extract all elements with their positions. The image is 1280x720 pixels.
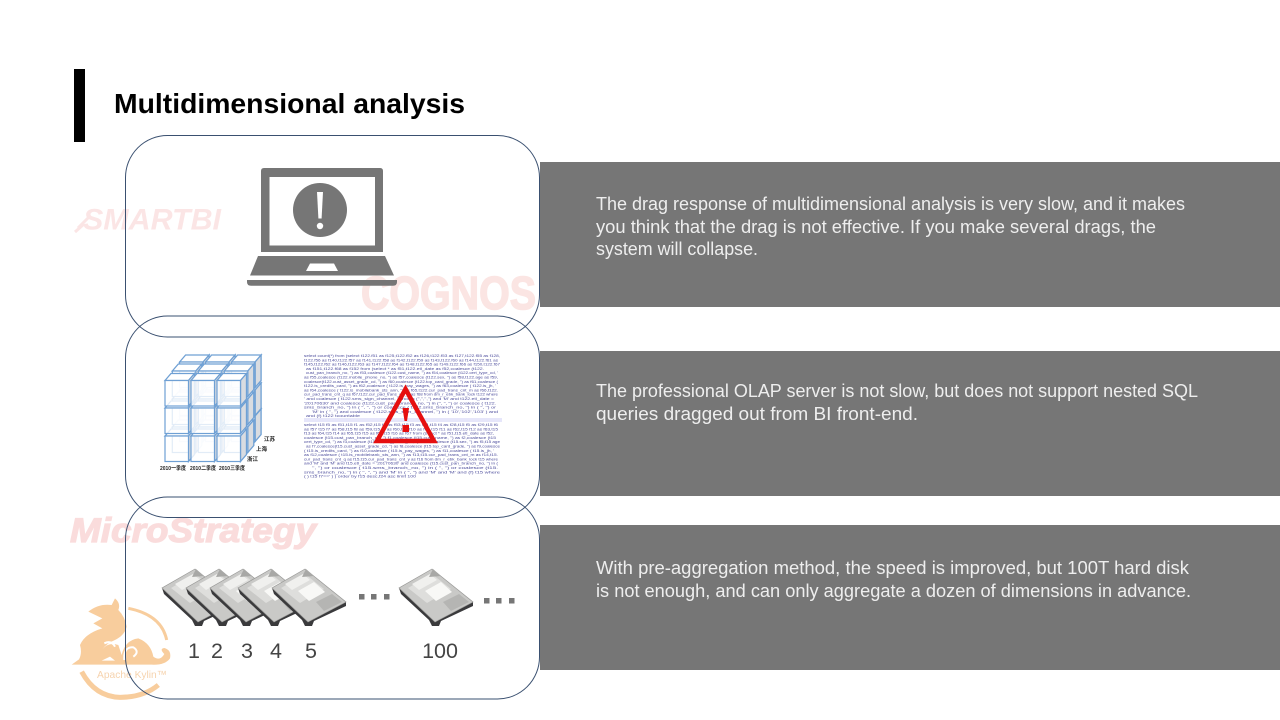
code: long SQL query: ( ) t15 f7==' ) ) order by f15 desc,f24 asc limit 100 [304,474,417,479]
code: long SQL query: as f55,coalesce (t122.mobile_phone_no, '') as f57,coalesce (t122.sex, '') as f58,t122.age as f59, [304,374,498,380]
code: long SQL query: ' and coalesce ( t122.sms_sign_channel, '') not in ('','','','') and 'M' and t122.etl_date = [304,396,495,401]
panel background [540,351,1280,496]
code: long SQL query: f13 as f64,t15 f14 as f65,t15 f15 as f66,t15 f16 as f67 from (select * as f51,t15.etl_date as f52, [304,431,494,436]
panel: slow drag response [540,162,1280,307]
code: long SQL query: cert_type_cd, '') as f3,coalesce (t15.mobile_phone_no, '') as f4,coalesce (t15.sex, '') as f5,t15 age [304,439,501,444]
disk numbers: 5 [305,639,317,663]
text block: slow drag response: The drag response of multidimensional analysis is very slow, and it makes [596,194,1185,214]
icon: warning triangle [377,389,434,441]
text block: slow drag response: you think that the drag is not effective. If you make several drags, the [596,217,1156,237]
text block: OLAP server limitation: queries dragged out from BI front-end. [596,404,918,424]
highlighted SQL line [304,418,502,422]
code: long SQL query: sms_branch_no, '') in ( '', '', '') or coalesce ( t122.sms_branch_no, '') in ( '', '') or [304,405,497,410]
watermark: Apache Kylin logo: Apache Kylin™ [97,669,167,681]
text block: OLAP server limitation: The professional OLAP server is not slow, but does not support nested SQL [596,381,1198,401]
code: long SQL query: ( t15.is_credits_card, '') as f10,coalesce ( t15.is_pay_wages, '') as f11,coalesce ( t15.is_jh, ' [304,448,494,453]
code: long SQL query: as f64,coalesce ( t122.is_mobilebank_sts_ann, '') as f65,t122.cur_pad_trans_cnt_m as f66,t122. [304,387,498,392]
icon: row of hard disks [162,569,514,626]
code: long SQL query: as f7,coalesce(t15.cust_asset_grade_cd, '') as f8,coalesce (t15.top_card_grade, '') as f9,coalesce [306,444,501,448]
code: long SQL query: select count(*) from (select t122.f51 as f125,t122.f52 as f126,t122.f53 as f127,t122.f55 as f128, [304,353,500,358]
code: long SQL query: cur_pad_trans_cnt_q as f67,t122.cur_pad_trans_cnt_y as f68 from dm_r_ebk_bank_lock t122 where [304,392,499,397]
code: long SQL query: coalesce (t15.cust_pan_branch_no, '') f1,coalesce (t15.cust_name, '') as f2,coalesce (t15 [304,435,497,440]
chart: OLAP data cube [160,355,276,472]
title accent bar [74,69,85,142]
text block: pre-aggregation limitation [596,558,1191,601]
disk numbers: 2 [211,639,223,663]
icon: laptop with alert [247,168,397,286]
cube axis labels: 浙江 [247,455,259,463]
panel background [540,162,1280,307]
cube axis labels: 2010一季度 [160,464,186,472]
watermark: SMARTBI logo: SMARTBI [83,204,222,236]
text block: pre-aggregation limitation: With pre-aggregation method, the speed is improved, but 100T hard disk [596,558,1190,578]
card outline: cube and SQL [126,316,540,518]
ellipsis after disk 100 [484,598,514,604]
cube axis labels: 2010三季度 [219,464,245,472]
code: long SQL query: and (f) t122 tcountable [306,413,361,418]
text block: slow drag response: system will collapse. [596,239,758,259]
ellipsis after disk 5 [359,594,390,600]
code: long SQL query: and 'M' and 'M' and t15.etl_date = '20170630' and coalesce (t15.cust_pan_branch_no, '') in ( [304,461,499,466]
watermark: MicroStrategy logo: MicroStrategy [70,512,318,550]
cube axis labels: 2010二季度 [190,464,216,472]
back layer of cubes [180,355,261,442]
text block: OLAP server limitation [596,381,1198,424]
code: long SQL query: as f12,coalesce ( t15.is_mobilebank_sts_ann, '') as f13,t15.cur_pad_trans_cnt_m as f14,t15. [304,452,498,457]
code: long SQL query: coalesce(t122.cust_asset_grade_cd, '') as f60,coalesce (t122.top_card_grade, '') as f61,coalesce ( [304,379,499,384]
code: long SQL query: cust_pan_branch_no, '') as f53,coalesce (t122.cust_name, '') as f54,coalesce (t122.cert_type_cd, ' [306,370,498,375]
code: long SQL query: '', '') or coalesce ( t15.sms_branch_no, '') in ( '', '') or coalesce (t15. [312,465,498,470]
card outline: laptop [126,136,540,337]
panel background [540,525,1280,670]
code: long SQL query: t122.f56 as f140,t122.f57 as f141,t122.f58 as f142,t122.f59 as f143,t122.f60 as f144,t122.f61 as [304,357,498,362]
cube axis labels [160,435,276,472]
panel: pre-aggregation limitation [540,525,1280,670]
disk numbers: 3 [241,639,253,663]
code: long SQL query: f145,t122.f62 as f146,t122.f63 as f147,t122.f64 as f148,t122.f65 as f149,t122.f66 as f150,t122.f67 [304,362,501,367]
watermark: Apache Kylin logo [72,598,170,697]
code: long SQL query: t122.is_credits_card, '') as f62,coalesce ( t122.is_pay_wages, '') as f63,coalesce ( t122.is_jh, ' [304,383,496,388]
cube axis labels: 上海 [256,445,268,453]
code: long SQL query: as f57 t15 f7 as f58,t15 f8 as f59,t15 f9 as f60,t15 f10 as f61,t15 f11 as f62,t15 f12 as f63,t15 [304,426,499,431]
code: long SQL query [304,353,502,479]
disk numbers: 4 [270,639,282,663]
panel: OLAP server limitation [540,351,1280,496]
front layer of cubes [165,374,246,462]
code: long SQL query: cur_pad_trans_cnt_q as f15,t15.cur_pad_trans_cnt_y as f16 from dm_r_ebk_bank_lock t15 where [304,456,499,461]
code: long SQL query: sms_branch_no, '') in ( '', '', '') and 'M' in ( '', '') and 'M' and 'M' and (f) t15 where [304,469,501,474]
title: Multidimensional analysis [114,88,465,119]
cube axis labels: 江苏 [264,435,276,443]
disk numbers: 100 [422,639,458,663]
code: long SQL query: 'M' in ( '', '') and coalesce ( t122.sms_sign_channel, '') in ( '10','102','103' ) and [312,409,498,414]
disk numbers: 1 [188,639,200,663]
middle layer of cubes [172,364,254,452]
code: long SQL query: select t15 f5 as f51,t15 f1 as f52,t15 f2 as f53,t15 f3 as f54,t15 f4 as f28,t15 f5 as f29,t15 f6 [304,422,499,427]
text block: pre-aggregation limitation: is not enough, and can only aggregate a dozen of dimensions in advance. [596,581,1191,601]
card outline: hard disks [126,497,540,699]
text block: slow drag response [596,194,1185,259]
watermark: Cognos logo: COGNOS [361,267,536,319]
disk numbers [188,639,458,663]
code: long SQL query: as f151,t122.f68 as f152 from (select * as f51,t122.etl_date as f52,coalesce (t122. [306,366,484,371]
code: long SQL query: '20170630' and coalesce (t122.cust_pan_branch_no, '') in ('', '', '') or coalesce ( t122. [304,400,496,405]
